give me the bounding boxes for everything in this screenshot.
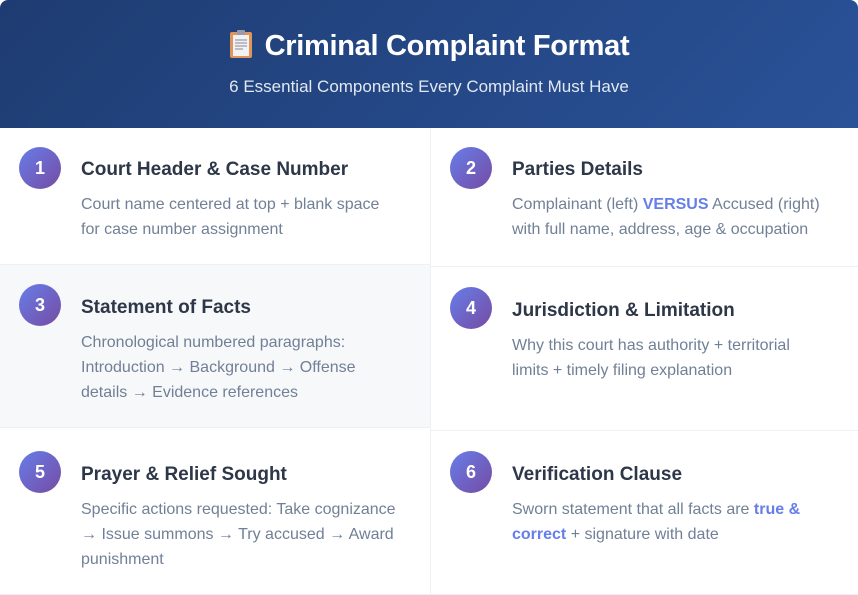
panel: verification: 6 bbox=[466, 462, 476, 482]
panel: prayer bbox=[0, 428, 431, 595]
panel: verification: Sworn statement that all facts are true & correct + signature with date bbox=[512, 501, 800, 543]
panel: statement of facts bbox=[0, 265, 431, 428]
panel: prayer: 5 bbox=[35, 462, 45, 482]
panel: verification: Verification Clause bbox=[512, 464, 682, 485]
panel: statement of facts: Statement of Facts bbox=[81, 297, 251, 318]
panel: jurisdiction: Why this court has authority + territorial limits + timely filing explanation bbox=[512, 337, 790, 379]
panel: court header: Court name centered at top + blank space for case number assignment bbox=[81, 196, 379, 238]
panel: prayer: Prayer & Relief Sought bbox=[81, 464, 287, 485]
subtitle: 6 Essential Components Every Complaint Must Have bbox=[229, 77, 629, 96]
panel: court header: Court Header & Case Number bbox=[81, 159, 348, 180]
panel: jurisdiction bbox=[431, 267, 858, 431]
panel: parties: Parties Details bbox=[512, 159, 643, 180]
icon: clipboard bbox=[230, 30, 252, 58]
panel: court header: 1 bbox=[35, 158, 45, 178]
panel: verification bbox=[431, 431, 858, 595]
panel: statement of facts: Chronological numbered paragraphs: Introduction → Background → Offense details → Evidence references bbox=[81, 334, 356, 401]
title: Criminal Complaint Format bbox=[265, 30, 629, 62]
panel: statement of facts: 3 bbox=[35, 295, 45, 315]
panel: parties bbox=[431, 128, 858, 267]
panel: prayer: Specific actions requested: Take cognizance → Issue summons → Try accused → Award punishment bbox=[81, 501, 396, 568]
header bbox=[0, 0, 858, 128]
panel: parties: 2 bbox=[466, 158, 476, 178]
panel: parties: Complainant (left) VERSUS Accused (right) with full name, address, age & occupation bbox=[512, 196, 820, 238]
panel: jurisdiction: 4 bbox=[466, 298, 476, 318]
panel: jurisdiction: Jurisdiction & Limitation bbox=[512, 300, 735, 321]
panel: court header bbox=[0, 128, 431, 265]
